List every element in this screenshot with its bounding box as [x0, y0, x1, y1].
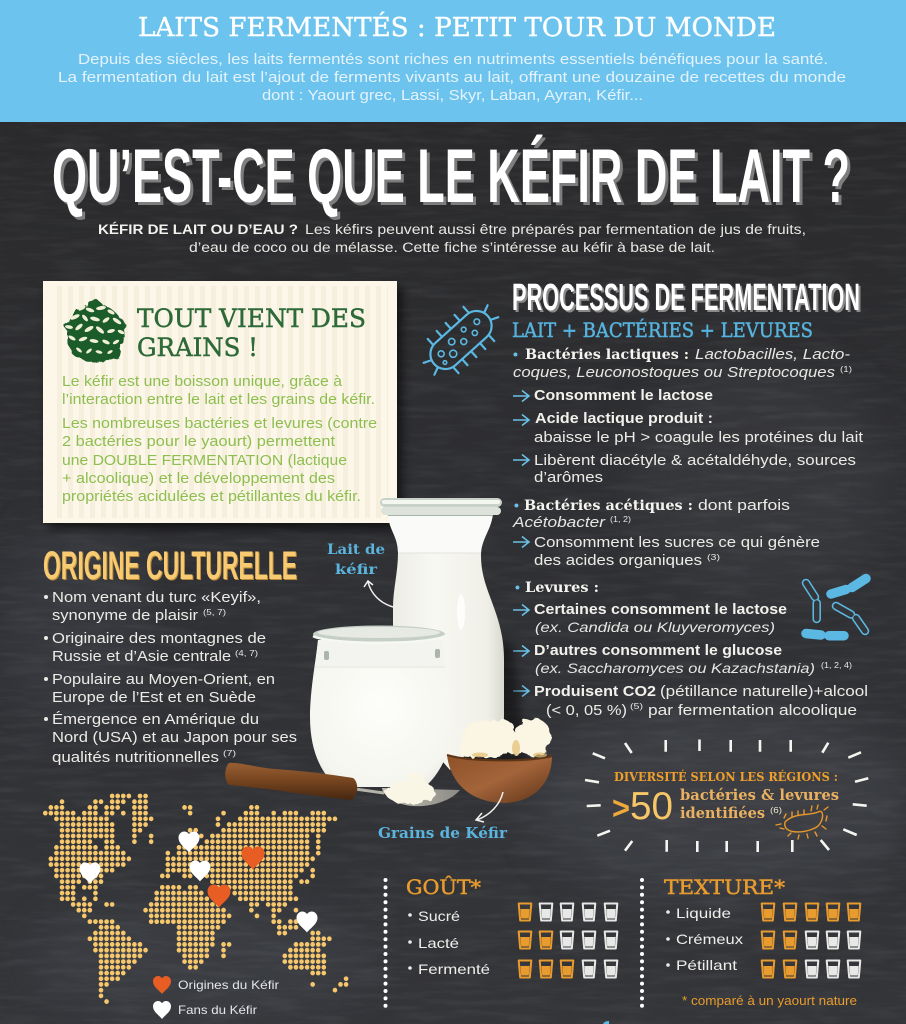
list item: consomment les sucres: des acides organiques: [534, 553, 702, 569]
photo: wooden bowl with kefir grains: [447, 718, 552, 803]
list item: consomment les sucres: (3): [707, 552, 720, 562]
panel: goût ratings: Fermenté: [418, 961, 490, 977]
text block: bactéries acétiques: dont parfois: [698, 498, 790, 514]
list: origine culturelle: (4, 7): [235, 648, 258, 658]
label: lait de kéfir: Lait de: [327, 542, 385, 558]
photo: jar of kefir: [310, 626, 452, 787]
list: origine culturelle: (5, 7): [203, 607, 226, 617]
header intro text: dont : Yaourt grec, Lassi, Skyr, Laban, Ayran, Kéfir...: [262, 88, 643, 104]
text block: bactéries lactiques: •: [513, 346, 518, 362]
subheading: lait + bactéries + levures: LAIT + BACTÉRIES + LEVURES: [512, 318, 813, 342]
heading: texture: TEXTURE*: [664, 875, 785, 899]
icon: kefir grain: [65, 300, 126, 362]
footnote: * comparé à un yaourt nature: [682, 994, 857, 1008]
text block: bactéries acétiques: [512, 497, 790, 531]
card body text: Le kéfir est une boisson unique, grâce à: [62, 374, 343, 390]
map legend: [153, 976, 279, 1019]
list item: acide lactique produit: abaisse le pH > coagule les protéines du lait: [534, 430, 863, 446]
panel: texture ratings: Pétillant: [676, 957, 737, 973]
list: origine culturelle: Émergence en Amérique du: [52, 711, 259, 728]
icons: texture glasses: [762, 904, 860, 978]
list: origine culturelle: synonyme de plaisir: [52, 608, 198, 624]
arrow: grains de kéfir: [476, 792, 503, 822]
header band: [0, 0, 906, 122]
list: origine culturelle: Nom venant du turc «Keyif»,: [52, 590, 261, 606]
photo: bottle of milk kefir: [380, 498, 528, 770]
list item: libèrent diacétyle: Libèrent diacétyle & acétaldéhyde, sources: [534, 453, 856, 469]
card body text: Les nombreuses bactéries et levures (contre: [62, 416, 377, 432]
list item: produisent CO2: [513, 684, 868, 719]
callout: diversité selon les régions: DIVERSITÉ SELON LES RÉGIONS :: [614, 769, 838, 784]
panel: goût ratings: Sucré: [418, 908, 460, 924]
text block: bactéries acétiques: Bactéries acétiques :: [524, 498, 693, 514]
icon: yeast cells: [806, 578, 866, 636]
label: lait de kéfir: kéfir: [335, 562, 378, 578]
icon: bacterium: [414, 294, 508, 386]
list item: d'autres consomment le glucose: (1, 2, 4): [821, 660, 852, 670]
list item: produisent CO2: Produisent CO2: [534, 684, 656, 700]
list item: certaines consomment le lactose: (ex. Candida ou Kluyveromyces): [535, 619, 775, 635]
list item: produisent CO2: (< 0, 05 %): [546, 703, 627, 719]
list item: d'autres consomment le glucose: D’autres consomment le glucose: [534, 643, 782, 659]
intro: kéfir de lait ou d'eau: [98, 222, 806, 255]
list item: produisent CO2: par fermentation alcoolique: [648, 703, 857, 719]
text block: levures heading: Levures :: [525, 580, 599, 596]
text block: bactéries acétiques: (1, 2): [610, 514, 631, 524]
text block: bactéries lactiques: Bactéries lactiques :: [525, 347, 689, 363]
heading: origine culturelle: ORIGINE CULTURELLE: [43, 544, 297, 588]
panel: texture ratings: [664, 875, 860, 1008]
heading: goût: GOÛT*: [406, 874, 481, 899]
list item: consomment les sucres: [513, 535, 820, 569]
list item: certaines consomment le lactose: Certaines consomment le lactose: [534, 602, 787, 618]
list item: libèrent diacétyle: d’arômes: [534, 470, 603, 486]
panel: tout vient des grains: [43, 281, 402, 529]
list item: certaines consomment le lactose: [513, 602, 787, 635]
card heading: TOUT VIENT DES: [137, 304, 366, 333]
card body text: l’interaction entre le lait et les grains de kéfir.: [62, 392, 375, 408]
header intro text: Depuis des siècles, les laits fermentés sont riches en nutriments essentiels bénéfiques pour la santé.: [78, 52, 828, 68]
list item: consomment les sucres: Consomment les sucres ce qui génère: [534, 535, 820, 551]
list: origine culturelle: (7): [223, 748, 236, 758]
card body text: + alcoolique) et le développement des: [62, 471, 335, 487]
text block: bactéries lactiques: coques, Leuconostoques ou Streptocoques: [513, 365, 835, 381]
header title: LAITS FERMENTÉS : PETIT TOUR DU MONDE: [138, 11, 776, 43]
panel: goût ratings: Lacté: [418, 935, 459, 951]
callout: diversité selon les régions: (6): [770, 805, 782, 815]
text block: bactéries lactiques: (1): [840, 364, 852, 374]
list item: acide lactique produit: Acide lactique produit :: [535, 411, 713, 427]
list: origine culturelle: Europe de l’Est et en Suède: [52, 690, 256, 706]
intro: kéfir de lait ou d'eau: Les kéfirs peuvent aussi être préparés par fermentation de jus de fruits,: [305, 222, 806, 237]
list: origine culturelle: Russie et d’Asie centrale: [52, 649, 231, 665]
text block: bactéries lactiques: [513, 346, 852, 381]
card heading: [137, 304, 366, 362]
world map: [45, 796, 347, 1002]
card heading: GRAINS !: [137, 333, 258, 362]
callout: diversité selon les régions: [612, 769, 839, 839]
map legend: Origines du Kéfir: [178, 978, 279, 992]
intro: kéfir de lait ou d'eau: d’eau de coco ou de mélasse. Cette fiche s’intéresse au kéfir à base de lait.: [189, 240, 715, 255]
card body text: propriétés acidulées et pétillantes du kéfir.: [62, 489, 361, 505]
list item: produisent CO2: (pétillance naturelle)+alcool: [660, 684, 868, 700]
callout: diversité selon les régions: bactéries & levures: [680, 786, 839, 804]
panel: texture ratings: Liquide: [676, 905, 731, 921]
text block: levures heading: •: [515, 579, 520, 595]
map legend: Fans du Kéfir: [178, 1003, 257, 1017]
card body text: une DOUBLE FERMENTATION (lactique: [62, 453, 347, 469]
panel: goût ratings: [406, 874, 617, 978]
list: origine culturelle: Originaire des montagnes de: [52, 631, 266, 647]
text block: bactéries lactiques: Lactobacilles, Lacto-: [695, 347, 850, 363]
intro: kéfir de lait ou d'eau: KÉFIR DE LAIT OU D’EAU ?: [98, 222, 298, 237]
callout: diversité selon les régions: 50: [630, 785, 673, 828]
text block: bactéries acétiques: •: [514, 497, 519, 513]
list item: d'autres consomment le glucose: (ex. Saccharomyces ou Kazachstania): [535, 660, 815, 676]
list item: d'autres consomment le glucose: [513, 643, 852, 676]
label: grains de kéfir: Grains de Kéfir: [378, 824, 508, 842]
list: origine culturelle: Populaire au Moyen-Orient, en: [52, 672, 275, 688]
header intro text: [58, 52, 846, 104]
list: origine culturelle: [44, 590, 297, 766]
list item: libèrent diacétyle: [513, 453, 856, 486]
text block: bactéries acétiques: Acétobacter: [512, 515, 606, 531]
icon: orange bacterium squiggle: [776, 805, 828, 839]
arrow: lait de kéfir: [364, 581, 393, 607]
list item: consomment le lactose: Consomment le lactose: [534, 388, 713, 404]
card body text: [62, 374, 377, 505]
list item: produisent CO2: (5): [630, 701, 643, 711]
list: origine culturelle: qualités nutritionnelles: [52, 750, 219, 766]
list item: acide lactique produit: [513, 411, 863, 446]
label: lait de kéfir: [327, 542, 385, 578]
map hearts: fans and origins: [80, 832, 318, 932]
header intro text: La fermentation du lait est l’ajout de ferments vivants au lait, offrant une douzaine de recettes du monde: [58, 70, 846, 86]
panel: texture ratings: Crémeux: [676, 931, 743, 947]
icons: goût glasses: [519, 904, 617, 978]
callout: diversité selon les régions: >: [612, 790, 630, 826]
card body text: 2 bactéries pour le yaourt) permettent: [62, 434, 335, 450]
photo: wooden spoon with grains: [225, 763, 460, 806]
list: origine culturelle: Nord (USA) et au Japon pour ses: [52, 730, 297, 746]
callout: diversité selon les régions: identifiées: [680, 804, 765, 822]
